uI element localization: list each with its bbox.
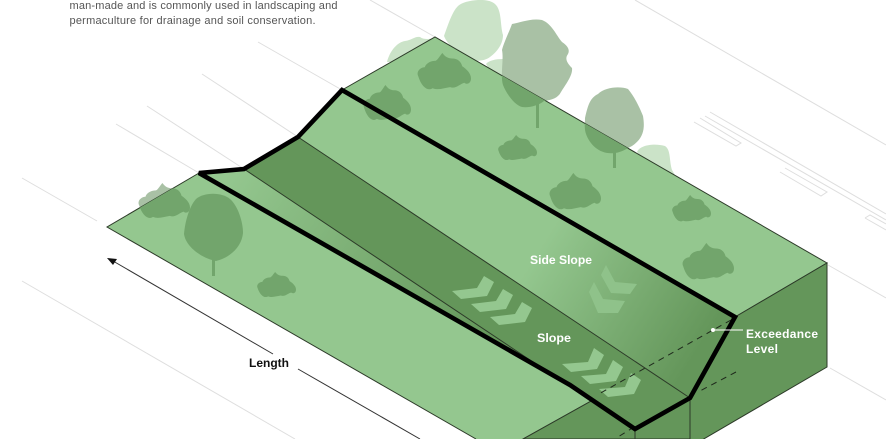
front earth walls [523, 398, 690, 439]
channel slope band [244, 137, 690, 429]
bold swale profile outline [199, 90, 735, 429]
length arrow [107, 258, 420, 439]
exceedance level callout [711, 327, 818, 356]
chevrons: channel upper group [452, 276, 532, 325]
chevrons: side slope [589, 265, 637, 313]
tree on left field [184, 194, 243, 276]
chevrons: channel lower group [562, 348, 641, 397]
exceedance level callout: Exceedance [746, 327, 818, 341]
label: Side Slope: Side Slope [530, 253, 592, 267]
intro text: permaculture for drainage and soil conservation. [70, 15, 316, 27]
intro text [70, 0, 338, 27]
tree lower part on field, right [584, 123, 628, 168]
bushes [139, 53, 734, 297]
exceedance level callout: Level [746, 342, 778, 356]
label: Slope: Slope [537, 331, 571, 345]
right earth wall [690, 263, 827, 439]
green field surface [107, 37, 827, 439]
dashed exceedance level lines [597, 320, 736, 437]
faded tree crowns and bush behind the edge [139, 20, 644, 218]
intro text: man-made and is commonly used in landscaping and [70, 0, 338, 12]
side slope: left bank [199, 169, 545, 370]
tree lower part on field, centre [502, 76, 546, 128]
faded trees behind the field [387, 0, 681, 185]
label: Length: Length [249, 356, 289, 370]
side slope: right bank [298, 90, 735, 398]
